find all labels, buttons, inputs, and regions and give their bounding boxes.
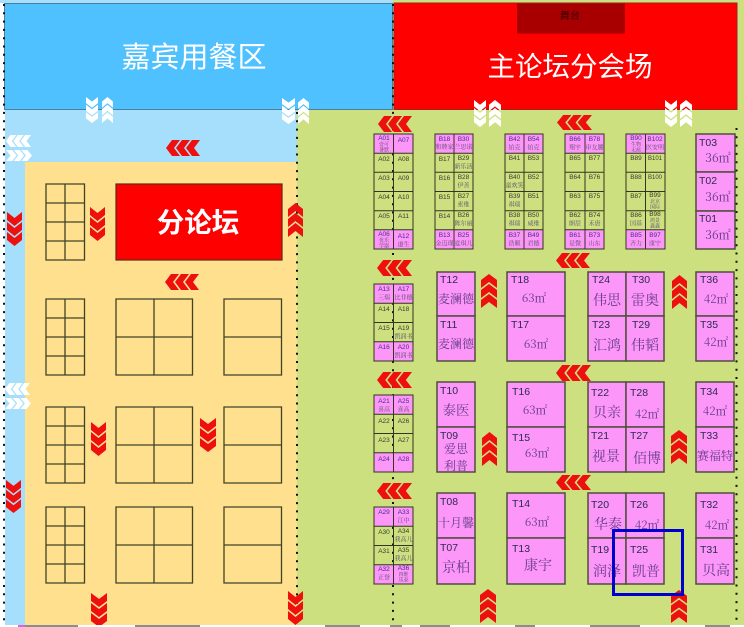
- booth T28: 42㎡: [635, 406, 660, 422]
- booth block B13-B30: 兰思诺: [454, 142, 473, 151]
- booth block B13-B30: 和睦家: [435, 142, 454, 151]
- booth block A01-A12: A09: [398, 175, 410, 182]
- booth T25: T25: [630, 544, 648, 556]
- booth T03: 36㎡: [705, 149, 731, 166]
- booth block A21-A28: A23: [378, 437, 390, 444]
- booth block B61-B78: B77: [589, 155, 601, 162]
- booth T27: T27: [630, 430, 648, 442]
- booth T29: 伟韬: [631, 335, 659, 355]
- booth block B85-B102: 北京: [650, 198, 660, 205]
- booth T22: [588, 382, 626, 427]
- booth block A01-A12: A11: [398, 213, 409, 220]
- booth T34: T34: [700, 386, 718, 398]
- booth block B13-B30: B26: [458, 212, 470, 219]
- booth T12: [437, 272, 475, 316]
- booth block B85-B102: B88: [630, 174, 642, 181]
- booth block B37-B54: B41: [509, 155, 521, 162]
- booth block A01-A12: A07: [398, 137, 410, 144]
- booth T21: T21: [591, 430, 609, 442]
- booth block B13-B30: 索维: [457, 200, 470, 208]
- booth block B85-B102: 医安明: [646, 142, 664, 152]
- booth T02: T02: [699, 175, 717, 187]
- booth block A13-A20: 三瑞: [378, 292, 390, 302]
- top strip left: [0, 0, 393, 3]
- booth block B85-B102: 鸿景: [650, 217, 660, 224]
- booth T11: [437, 316, 475, 361]
- booth block A29-A36: 江中: [397, 516, 410, 524]
- booth T03: T03: [699, 137, 717, 149]
- booth block B85-B102: B102: [647, 136, 663, 143]
- booth block B37-B54: B50: [528, 212, 540, 219]
- booth block A01-A12: 学器: [379, 242, 389, 250]
- booth block B61-B78: B74: [589, 212, 601, 219]
- booth T09: 利普: [444, 457, 468, 474]
- booth T26: 42㎡: [635, 517, 660, 533]
- booth block B61-B78: B62: [569, 212, 581, 219]
- booth T13: [507, 538, 565, 584]
- booth T12: 麦澜德: [438, 290, 475, 307]
- booth block A13-A20: A17: [398, 286, 410, 293]
- booth block B13-B30: B13: [439, 232, 451, 239]
- booth T21: 视景: [592, 446, 620, 466]
- booth block B61-B78: B64: [569, 174, 581, 181]
- booth block B85-B102: B100: [648, 175, 663, 181]
- booth T13: T13: [512, 543, 530, 555]
- booth T36: [696, 272, 734, 316]
- booth T02: 36㎡: [705, 188, 731, 205]
- booth T17: 63㎡: [524, 336, 549, 352]
- booth T20: T20: [591, 499, 609, 511]
- booth T20: [588, 493, 626, 538]
- booth block A01-A12: 道生: [397, 240, 410, 248]
- red arrows: leftward: [165, 115, 592, 499]
- booth block A29-A36: A29: [378, 509, 390, 516]
- booth block B13-B30: B16: [439, 175, 451, 182]
- booth block B37-B54: B51: [528, 193, 540, 200]
- booth block B37-B54: 祺瑞: [508, 200, 521, 208]
- booth block B13-B30: 陈尔丽: [454, 218, 473, 228]
- booth block B61-B78: [565, 134, 604, 249]
- booth block A29-A36: A32: [378, 566, 390, 573]
- booth T22: T22: [591, 387, 609, 399]
- booth block B13-B30: B18: [439, 136, 451, 143]
- booth block B85-B102: 生物: [631, 141, 641, 148]
- booth block A01-A12: A08: [398, 156, 410, 163]
- booth block A13-A20: A18: [398, 306, 410, 313]
- booth T32: 42㎡: [705, 517, 730, 533]
- booth block B85-B102: 国际: [650, 204, 661, 210]
- booth T31: T31: [700, 544, 718, 556]
- booth T19: 润泽: [593, 561, 621, 581]
- booth T07: 京柏: [442, 557, 470, 577]
- booth block A29-A36: [374, 507, 413, 584]
- booth T24: [588, 272, 626, 316]
- booth block A01-A12: A04: [378, 194, 390, 201]
- booth T24: T24: [592, 274, 610, 286]
- booth T30: T30: [632, 274, 650, 286]
- white arrows: [5, 97, 692, 409]
- booth T07: [437, 538, 475, 584]
- panel: sub forum: [116, 184, 282, 260]
- booth block A01-A12: 壹可: [379, 141, 389, 148]
- booth block B61-B78: 朗辰: [569, 218, 581, 228]
- booth block B37-B54: 童欢笑: [505, 180, 524, 190]
- booth block A01-A12: [374, 134, 413, 250]
- booth T10: T10: [440, 385, 458, 397]
- booth T33: [696, 427, 734, 472]
- booth T25: [626, 538, 664, 584]
- booth block A21-A28: A25: [398, 398, 410, 405]
- booth T17: [507, 316, 565, 361]
- stage: 舞台: [560, 9, 580, 22]
- booth block A01-A12: A01: [378, 135, 390, 142]
- booth T22: 贝亲: [593, 402, 621, 422]
- booth block A01-A12: A10: [398, 194, 410, 201]
- booth block A29-A36: A36: [398, 565, 410, 572]
- booth block B85-B102: B98: [649, 211, 661, 218]
- booth T23: T23: [592, 319, 610, 331]
- booth block A01-A12: A03: [378, 175, 390, 182]
- booth T19: T19: [591, 544, 609, 556]
- booth T18: 63㎡: [522, 290, 547, 306]
- booth T08: [437, 493, 475, 538]
- booth T08: 十月馨: [438, 514, 474, 531]
- booth block A13-A20: A20: [398, 344, 410, 351]
- booth block B61-B78: B65: [569, 155, 581, 162]
- booth block B85-B102: B87: [630, 193, 642, 200]
- panel: guest dining area: [4, 4, 392, 110]
- booth T01: [696, 211, 735, 249]
- booth block A01-A12: A12: [398, 233, 410, 240]
- booth T01: 36㎡: [705, 226, 731, 243]
- booth block B37-B54: B49: [528, 232, 540, 239]
- booth T18: T18: [511, 274, 529, 286]
- booth block B85-B102: [626, 134, 665, 249]
- booth block B37-B54: 铂克: [508, 142, 521, 152]
- empty booth grids in yellow hall: [46, 184, 282, 583]
- booth T23: 汇鸿: [593, 335, 621, 355]
- booth block A13-A20: A13: [378, 286, 390, 293]
- booth T31: [696, 538, 734, 584]
- booth T25: 凯普: [632, 561, 660, 581]
- booth block B61-B78: 禾唐: [588, 218, 601, 228]
- booth T35: 42㎡: [704, 334, 729, 350]
- booth block B61-B78: B61: [569, 232, 581, 239]
- booth T15: [507, 427, 565, 472]
- booth block A13-A20: [374, 284, 413, 361]
- booth block A01-A12: 暑默: [379, 146, 389, 154]
- booth T10: [437, 382, 475, 427]
- booth block B61-B78: B78: [589, 136, 601, 143]
- heading: guest dining: 嘉宾用餐区: [121, 41, 267, 74]
- booth block B37-B54: B52: [528, 174, 540, 181]
- booth T35: T35: [700, 319, 718, 331]
- booth block A01-A12: A05: [378, 213, 390, 220]
- booth block B37-B54: B37: [509, 232, 521, 239]
- booth block B37-B54: B42: [509, 136, 521, 143]
- booth block B85-B102: 鑫鑫: [650, 222, 660, 230]
- panel: corridor light blue: [5, 109, 297, 625]
- red arrows: upward: [288, 203, 687, 623]
- booth block A13-A20: A16: [378, 344, 390, 351]
- booth block B13-B30: [435, 134, 473, 249]
- booth block B37-B54: 浩顺: [508, 238, 521, 248]
- booth T08: T08: [440, 496, 458, 508]
- booth block A21-A28: A24: [378, 456, 390, 463]
- booth block B85-B102: 无痕: [631, 146, 641, 154]
- booth block B61-B78: B63: [569, 193, 581, 200]
- booth block B85-B102: B85: [630, 232, 642, 239]
- booth T20: 华泰: [594, 514, 622, 534]
- booth block B61-B78: B75: [589, 193, 601, 200]
- booth T27: 佰博: [633, 448, 661, 468]
- heading: main forum: 主论坛分会场: [488, 51, 652, 82]
- booth block B13-B30: B29: [458, 155, 470, 162]
- booth block A01-A12: 优乐: [379, 237, 390, 244]
- booth block B85-B102: B101: [648, 156, 663, 162]
- booth T26: [626, 493, 664, 538]
- booth block A01-A12: A06: [378, 231, 390, 238]
- booth T30: 雷奥: [631, 290, 659, 310]
- booth T33: 赛福特: [697, 447, 733, 464]
- booth block A21-A28: 喜高: [397, 404, 410, 414]
- booth T35: [696, 316, 734, 361]
- booth T21: [588, 427, 626, 472]
- booth block B61-B78: 审友騰: [585, 142, 604, 152]
- panel: sub forum: 分论坛: [157, 207, 239, 238]
- booth block B13-B30: B17: [439, 156, 451, 163]
- booth T16: 63㎡: [523, 402, 548, 418]
- booth block A21-A28: A21: [378, 398, 390, 405]
- booth block A29-A36: 正誉: [378, 572, 390, 582]
- booth block A21-A28: [374, 395, 413, 472]
- booth block B37-B54: [505, 134, 543, 249]
- booth block B13-B30: 伊善: [457, 180, 470, 190]
- booth block A21-A28: A22: [378, 418, 390, 425]
- booth block B13-B30: B28: [458, 174, 470, 181]
- booth block A21-A28: A26: [398, 418, 410, 425]
- booth block B61-B78: 山东: [588, 238, 601, 248]
- booth T18: [507, 272, 565, 316]
- booth block B61-B78: 翔宇: [569, 142, 581, 152]
- booth block B85-B102: B99: [649, 192, 661, 199]
- booth T16: T16: [512, 386, 530, 398]
- booth T29: T29: [632, 319, 650, 331]
- booth block B37-B54: 威维: [527, 218, 540, 228]
- booth block A01-A12: A02: [378, 156, 390, 163]
- highlight box: T25 blue frame: [614, 530, 682, 594]
- booth block B13-B30: B30: [458, 136, 470, 143]
- booth T32: [696, 493, 734, 538]
- booth block A29-A36: 四维: [398, 571, 409, 578]
- booth block A29-A36: A31: [378, 548, 390, 555]
- booth T28: [626, 382, 664, 427]
- booth T27: [626, 427, 664, 472]
- booth T11: 麦澜德: [438, 335, 475, 352]
- booth block B37-B54: 君德: [527, 238, 540, 248]
- booth block A21-A28: A27: [398, 437, 410, 444]
- booth T29: [626, 316, 664, 361]
- booth block B13-B30: B15: [439, 194, 451, 201]
- booth T14: [507, 493, 565, 538]
- bottom edge strip: [0, 625, 744, 627]
- booth block A29-A36: A30: [378, 529, 390, 536]
- booth block A21-A28: 喜高: [378, 404, 390, 414]
- booth block A21-A28: A28: [398, 456, 410, 463]
- booth T36: T36: [700, 274, 718, 286]
- booth T11: T11: [440, 319, 457, 331]
- panel: green exhibition hall: [297, 109, 744, 625]
- booth T09: T09: [440, 430, 458, 442]
- booth block B85-B102: B89: [630, 155, 642, 162]
- booth block B37-B54: B39: [509, 193, 521, 200]
- booth block B37-B54: B53: [528, 155, 540, 162]
- booth block B37-B54: B38: [509, 212, 521, 219]
- booth T17: T17: [511, 319, 529, 331]
- booth block B61-B78: B73: [589, 232, 601, 239]
- booth block B61-B78: 是微: [569, 238, 581, 248]
- booth T36: 42㎡: [704, 291, 729, 307]
- booth block B37-B54: 祺瑞: [508, 218, 521, 228]
- booth block B37-B54: B40: [509, 174, 521, 181]
- booth block A13-A20: A19: [398, 325, 410, 332]
- booth block A29-A36: A33: [398, 509, 410, 516]
- booth T19: [588, 538, 626, 584]
- booth block B13-B30: 夏琪儿: [454, 238, 473, 248]
- panel: yellow exhibition hall: [25, 162, 297, 625]
- booth block A13-A20: A15: [378, 325, 390, 332]
- booth block A13-A20: 凯润书: [394, 332, 413, 340]
- booth T07: T07: [440, 542, 458, 554]
- booth T33: T33: [700, 430, 718, 442]
- booth T12: T12: [440, 274, 458, 286]
- top strip right: [393, 0, 744, 110]
- booth block B13-B30: B27: [458, 193, 470, 200]
- booth T34: [696, 382, 734, 427]
- booth block B85-B102: 国基: [630, 218, 642, 228]
- booth block B13-B30: B25: [458, 232, 470, 239]
- booth T16: [507, 382, 565, 427]
- booth T24: 伟思: [593, 290, 622, 310]
- booth block A13-A20: 凯润书: [394, 350, 413, 360]
- booth T23: [588, 316, 626, 361]
- booth block B85-B102: B90: [630, 135, 642, 142]
- booth T01: T01: [699, 213, 717, 225]
- booth block A29-A36: 我高儿: [394, 534, 413, 544]
- booth block B85-B102: B86: [630, 212, 642, 219]
- booth block A13-A20: 比非德: [394, 292, 413, 302]
- booth block A13-A20: A14: [378, 306, 390, 313]
- booth T09: [437, 427, 475, 474]
- booth block B85-B102: 康宁: [649, 238, 661, 248]
- booth block B85-B102: B97: [649, 232, 661, 239]
- booth block B37-B54: 铂克: [527, 142, 540, 152]
- booth block A29-A36: 乐泰: [398, 576, 409, 584]
- booth T30: [626, 272, 664, 316]
- booth T10: 泰医: [442, 399, 470, 419]
- booth T14: T14: [512, 498, 530, 510]
- booth T09: 爱思: [444, 440, 469, 457]
- booth T15: 63㎡: [525, 445, 550, 461]
- booth block B37-B54: B54: [528, 136, 540, 143]
- booth block B13-B30: 新乐活: [454, 162, 473, 170]
- booth T26: T26: [630, 499, 648, 511]
- booth T02: [696, 172, 735, 211]
- booth T28: T28: [630, 387, 648, 399]
- booth block A29-A36: A34: [398, 528, 410, 535]
- booth T34: 42㎡: [703, 403, 728, 419]
- stage: [517, 4, 625, 34]
- panel: main forum hall: [394, 3, 737, 110]
- booth block B61-B78: B76: [589, 174, 601, 181]
- booth block A29-A36: A35: [398, 547, 410, 554]
- booth block B13-B30: B14: [439, 213, 451, 220]
- booth block B85-B102: 齐力: [630, 238, 642, 248]
- booth T31: 贝高: [702, 560, 730, 580]
- booth block B13-B30: 金迈瑾: [435, 238, 454, 248]
- booth block B61-B78: B66: [569, 136, 581, 143]
- booth T03: [696, 134, 735, 172]
- booth block A29-A36: 我高儿: [394, 554, 413, 562]
- booth T13: 康宇: [524, 555, 552, 575]
- booth T15: T15: [512, 432, 530, 444]
- booth T32: T32: [700, 499, 718, 511]
- red arrows: downward: [6, 207, 303, 627]
- booth T14: 63㎡: [525, 514, 550, 530]
